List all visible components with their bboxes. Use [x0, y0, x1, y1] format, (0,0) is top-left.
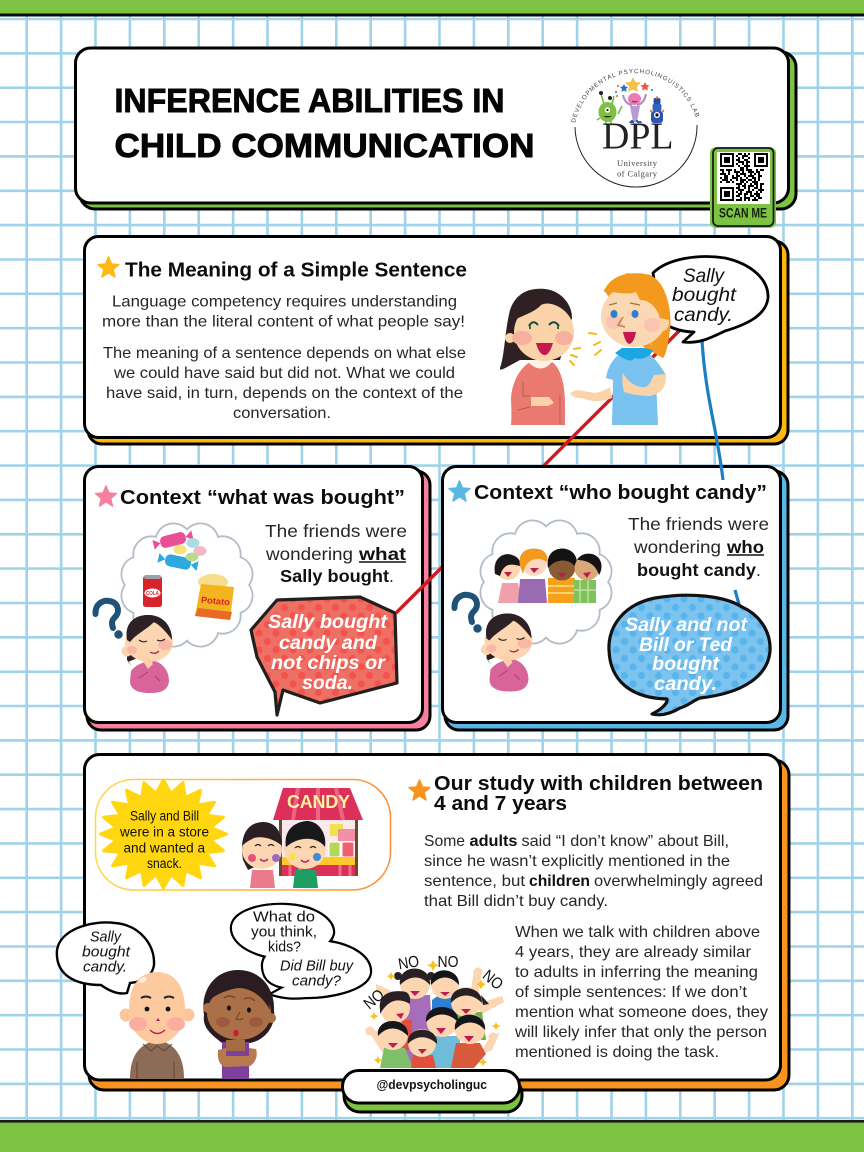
scene text: snack.: [147, 856, 182, 871]
handle badge: [342, 1070, 522, 1112]
body text: conversation.: [233, 405, 331, 422]
speech bubble: Sally bought candy: bought: [82, 944, 131, 960]
text block: adults and children: Some: [424, 833, 465, 850]
description: [628, 514, 769, 580]
scene text: and wanted a: [124, 840, 205, 856]
logo: Developmental Psycholinguistics Lab: [571, 68, 700, 188]
text block: adults and children: sentence, but: [424, 873, 526, 890]
text block: children above 4 years: 4 years, they are already similar: [515, 944, 752, 961]
callout: who bubble: candy.: [654, 673, 717, 695]
illustration: candy shop: CANDY: [287, 792, 350, 812]
label: NO shouts: NO: [438, 954, 458, 971]
speech bubble: what do you think and did Bill buy candy: [232, 905, 370, 998]
icon: blue monster: [650, 96, 664, 123]
description: wondering: [633, 537, 721, 557]
scene text: Sally and Bill: [130, 808, 199, 824]
panel: Context what was bought: [84, 466, 430, 730]
text block: children above 4 years: [514, 924, 768, 1061]
speech bubble: Sally bought candy: candy.: [83, 960, 127, 976]
text block: children above 4 years: will likely infer that only the person: [514, 1024, 767, 1041]
heading: Our study with children between: [434, 772, 763, 795]
callout: what bubble: not chips or: [271, 652, 386, 674]
callout: what bubble: [251, 597, 397, 715]
text block: adults and children: since he wasn’t explicitly mentioned in the: [424, 853, 730, 870]
illustration: girl with face paint: [242, 822, 282, 888]
description: wondering: [265, 544, 353, 564]
body text: have said, in turn, depends on the context of the: [106, 385, 463, 402]
body text: [102, 294, 466, 422]
description: The friends were: [628, 514, 769, 534]
text block: adults and children: adults: [470, 833, 518, 850]
icon: yellow sun burst: [100, 780, 226, 888]
panel: Context who bought candy: [442, 466, 788, 730]
label: NO shouts: NO: [397, 953, 421, 974]
icon: blue star: [449, 481, 470, 501]
arrow: blue connector segment above bubble: [735, 590, 740, 608]
handle badge: @devpsycholinguc: [376, 1077, 487, 1092]
thought cloud: candy, cola, chips: [121, 523, 253, 647]
friend 3: [548, 548, 577, 603]
logo: Developmental Psycholinguistics Lab: of Calgary: [617, 168, 658, 178]
panel: title card: [74, 46, 798, 228]
icon: orange star: [409, 780, 430, 800]
heading: Context “who bought candy”: [474, 481, 767, 504]
title: [114, 82, 534, 164]
label: NO shouts: NO: [479, 967, 506, 994]
callout: who bubble: [609, 595, 770, 715]
panel: The Meaning of a Simple Sentence: [84, 236, 788, 444]
text block: children above 4 years: mention what someone does, they: [515, 1004, 768, 1021]
body text: Language competency requires understanding: [112, 294, 457, 310]
text block: children above 4 years: to adults in inferring the meaning: [515, 964, 758, 981]
icon: thinking girl: [122, 615, 173, 693]
illustration: boy with face paint: [284, 821, 326, 888]
icon: question mark: [95, 601, 123, 639]
heading: 4 and 7 years: [434, 792, 567, 815]
sparkles: [370, 960, 500, 1066]
description: [265, 521, 407, 586]
scene panel: candy store: [96, 780, 390, 890]
callout: what bubble: candy and: [279, 632, 378, 654]
callout: who bubble: Sally and not: [625, 614, 749, 636]
description: Sally bought: [280, 566, 389, 586]
illustration: woman with crossed arms: [203, 970, 276, 1079]
middle row children: [380, 987, 504, 1068]
logo: Developmental Psycholinguistics Lab: DPL: [602, 116, 674, 158]
scene text: were in a store: [119, 824, 209, 840]
label: NO shouts: [361, 953, 506, 1013]
icon: potato chips: Potato: [201, 595, 231, 607]
title: CHILD COMMUNICATION: [114, 127, 534, 164]
text block: children above 4 years: mentioned is doing the task.: [515, 1044, 719, 1061]
logo: Developmental Psycholinguistics Lab: DEVELOPMENTAL PSYCHOLINGUISTICS LAB: [571, 68, 700, 122]
body text: The meaning of a sentence depends on what else: [103, 345, 466, 362]
friend 2: [518, 549, 548, 603]
text block: adults and children: that Bill didn’t buy candy.: [424, 893, 608, 910]
description: .: [756, 560, 761, 580]
scene text: [119, 808, 209, 871]
panel: Our study with children: [57, 754, 789, 1090]
callout: who bubble: bought: [652, 653, 721, 675]
illustration: yellow speech ticks: [570, 333, 601, 365]
body text: we could have said but did not. What we could: [113, 365, 455, 382]
illustration: crowd of children shouting no: [361, 953, 506, 1068]
icon: stars above monsters: [615, 77, 653, 97]
speech bubble: what do you think and did Bill buy candy: Did Bill buy: [280, 958, 354, 974]
speech bubble: what do you think and did Bill buy candy: candy?: [292, 974, 342, 990]
heading: [434, 772, 763, 815]
speech bubble: what do you think and did Bill buy candy: you think,: [251, 924, 317, 940]
speech bubble: Sally bought candy: Sally: [683, 265, 725, 287]
friend 4: [574, 554, 602, 603]
icon: green monster: [597, 91, 622, 125]
description: who: [726, 537, 764, 557]
description: what: [358, 544, 406, 564]
arrow: blue connector from sentence to who context: [702, 340, 723, 480]
heading: The Meaning of a Simple Sentence: [125, 258, 467, 282]
icon: pink monster: [623, 93, 646, 123]
illustration: candy shop: [273, 788, 363, 876]
text block: children above 4 years: When we talk with children above: [515, 924, 760, 941]
body text: more than the literal content of what people say!: [102, 314, 465, 330]
QR code badge: SCAN ME: [719, 206, 767, 220]
speech bubble: what do you think and did Bill buy candy: What do: [253, 910, 315, 926]
callout: what bubble: Sally bought: [268, 611, 389, 633]
QR code badge: [710, 147, 776, 228]
description: .: [389, 566, 394, 586]
icon: question mark: [454, 595, 482, 633]
back row children: [376, 968, 482, 1068]
text block: children above 4 years: of simple sentences: If we don’t: [515, 984, 748, 1001]
callout: what bubble: soda.: [302, 672, 353, 694]
title: INFERENCE ABILITIES IN: [114, 82, 504, 119]
arrow: red connector from sentence to what context: [396, 328, 682, 613]
text block: adults and children: [424, 833, 763, 910]
top banner: [0, 0, 864, 16]
heading: Context “what was bought”: [120, 486, 405, 509]
description: The friends were: [265, 521, 407, 541]
friend 1: [495, 554, 522, 603]
bottom banner: [0, 1120, 864, 1152]
text block: adults and children: overwhelmingly agreed: [594, 873, 763, 890]
illustration: bald man: [120, 972, 194, 1079]
icon: candies: [152, 529, 206, 572]
illustration: girl speaking: [570, 273, 670, 425]
QR modules: [720, 153, 768, 201]
icon: pink star: [96, 486, 116, 506]
description: bought candy: [637, 560, 756, 580]
speech bubble: Sally bought candy: Sally: [90, 930, 122, 946]
front row children: [366, 1014, 500, 1068]
speech bubble: Sally bought candy: [57, 922, 154, 993]
callout: who bubble: Bill or Ted: [639, 634, 733, 656]
thought cloud: group of friends: [480, 520, 612, 644]
icon: thinking girl: [481, 614, 532, 692]
illustration: girl listening: [500, 289, 574, 425]
icon: yellow star: [98, 257, 119, 277]
speech bubble: Sally bought candy: bought: [672, 284, 738, 306]
icon: cola can: COLA: [146, 591, 159, 597]
speech bubble: what do you think and did Bill buy candy: kids?: [268, 940, 301, 956]
text block: adults and children: children: [529, 873, 590, 890]
label: NO shouts: NO: [361, 987, 388, 1013]
speech bubble: Sally bought candy: [653, 257, 768, 342]
logo: Developmental Psycholinguistics Lab: University: [617, 158, 658, 168]
text block: adults and children: said “I don’t know” about Bill,: [522, 833, 729, 850]
speech bubble: Sally bought candy: candy.: [674, 304, 733, 326]
